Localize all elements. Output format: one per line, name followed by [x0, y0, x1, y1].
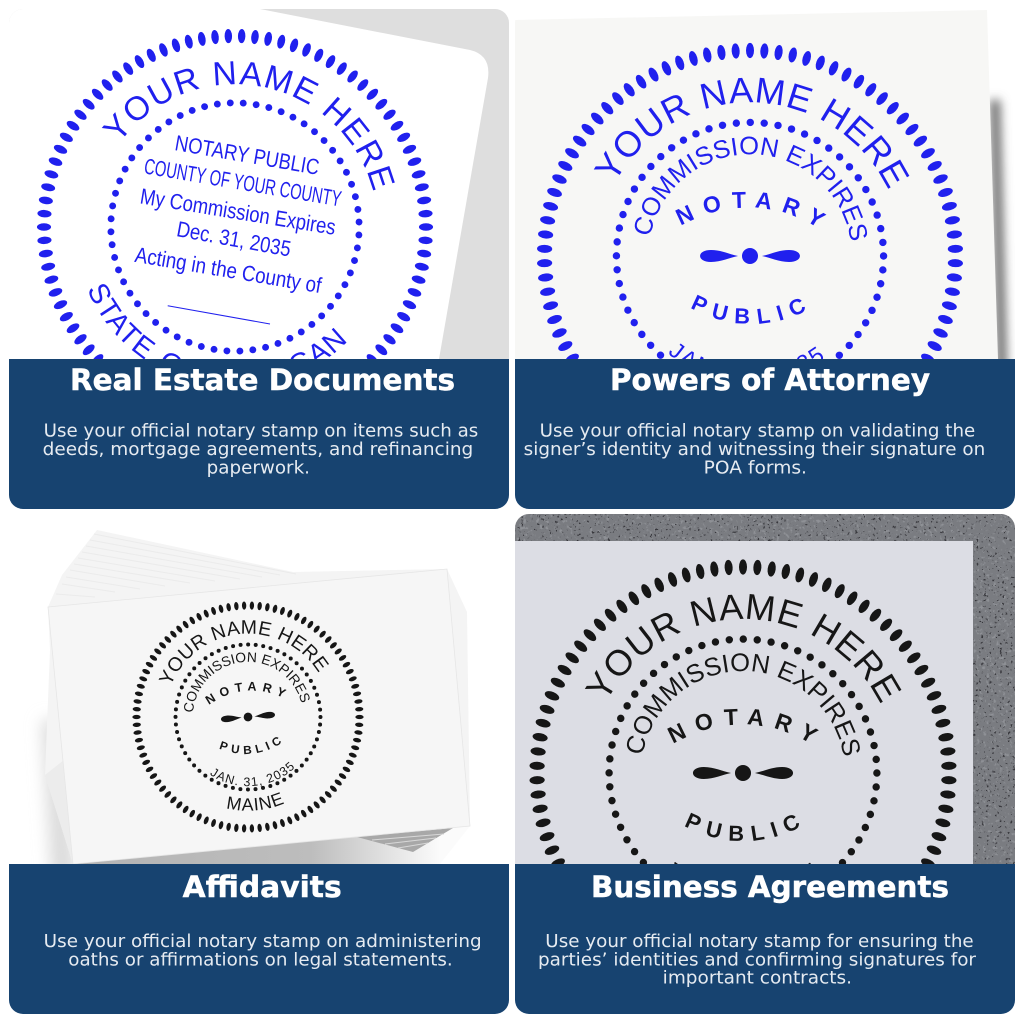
- blue notary seal: COMMISSION EXPIRES: [634, 136, 868, 240]
- body text: Use your official notary stamp on items such as: [44, 422, 478, 442]
- body text: parties’ identities and confirming signatures for: [538, 950, 977, 970]
- blue notary seal: YOUR NAME HERE: [102, 61, 395, 190]
- black notary seal: PUBLIC: [685, 812, 799, 841]
- black notary seal: YOUR NAME HERE: [158, 620, 329, 682]
- photo backdrop: [9, 514, 509, 864]
- seal centre text: My Commission Expires: [139, 184, 338, 240]
- blue notary seal: [36, 29, 434, 359]
- photo backdrop: [9, 9, 509, 359]
- body text: Use your official notary stamp on administering: [44, 932, 482, 952]
- body text: POA forms.: [704, 458, 807, 478]
- body text: [538, 932, 977, 989]
- seal centre text: [133, 130, 344, 324]
- body text: Use your official notary stamp on validating the: [540, 422, 975, 442]
- blue notary seal: [537, 42, 963, 359]
- heading: Business Agreements: [591, 870, 949, 904]
- black notary seal: NOTARY: [667, 708, 819, 744]
- caption box: [9, 359, 509, 509]
- white card: [9, 9, 488, 359]
- black notary seal: YOUR NAME HERE: [584, 594, 902, 704]
- blue notary seal: PUBLIC: [691, 294, 805, 324]
- black notary seal: JAN. 31, 2035: [210, 762, 294, 787]
- black notary seal: JAN. 31, 2035: [674, 862, 811, 864]
- blue notary seal: NOTARY: [675, 192, 826, 226]
- soft left shadow: [42, 720, 76, 880]
- paper sheet: [515, 10, 998, 359]
- black notary seal: NOTARY: [205, 682, 286, 704]
- body text: signer’s identity and witnessing their signature on: [524, 440, 985, 460]
- black notary seal: MAINE: [227, 792, 284, 811]
- body text: important contracts.: [663, 969, 852, 989]
- body text: Use your official notary stamp for ensuring the: [545, 932, 974, 952]
- caption box: [515, 864, 1015, 1014]
- panel: affidavits: [9, 530, 509, 1014]
- body text: paperwork.: [207, 458, 310, 478]
- seal centre text: COUNTY OF YOUR COUNTY: [142, 154, 344, 212]
- top card: [48, 569, 470, 864]
- blue notary seal: JAN. 31, 2035: [669, 344, 823, 359]
- heading: Affidavits: [183, 870, 342, 904]
- seal centre text: Dec. 31, 2035: [175, 216, 293, 262]
- lower right stack edge: [357, 828, 453, 852]
- panel: real estate documents: [9, 9, 509, 509]
- paper sheet: [515, 541, 973, 864]
- back card stack: [45, 530, 470, 864]
- blue notary seal: YOUR NAME HERE: [594, 78, 910, 189]
- black notary seal: PUBLIC: [220, 737, 281, 754]
- black notary seal: COMMISSION EXPIRES: [626, 653, 860, 756]
- body text: oaths or affirmations on legal statements.: [68, 950, 453, 970]
- concrete backdrop: [515, 514, 1015, 864]
- sheet shadow: [990, 100, 1007, 375]
- concrete dark speckle: [515, 514, 1015, 864]
- blue notary seal: STATE OF MICHIGAN: [89, 284, 346, 359]
- seal centre text: Acting in the County of: [133, 242, 324, 298]
- body text: [524, 423, 984, 474]
- caption box: [9, 864, 509, 1014]
- heading: Real Estate Documents: [70, 363, 455, 397]
- caption box: [515, 359, 1015, 509]
- black notary seal: [132, 602, 364, 832]
- concrete light speckle: [515, 514, 1015, 864]
- heading: Powers of Attorney: [610, 363, 930, 397]
- body text: deeds, mortgage agreements, and refinancing: [43, 440, 473, 460]
- body text: [43, 422, 478, 478]
- black notary seal: COMMISSION EXPIRES: [184, 652, 310, 712]
- body text: [44, 932, 482, 970]
- panel: business agreements: [515, 514, 1015, 1014]
- seal centre text: NOTARY PUBLIC: [173, 130, 321, 180]
- black notary seal: [530, 559, 956, 864]
- under-card shadow: [78, 837, 432, 864]
- panel: powers of attorney: [515, 10, 1015, 509]
